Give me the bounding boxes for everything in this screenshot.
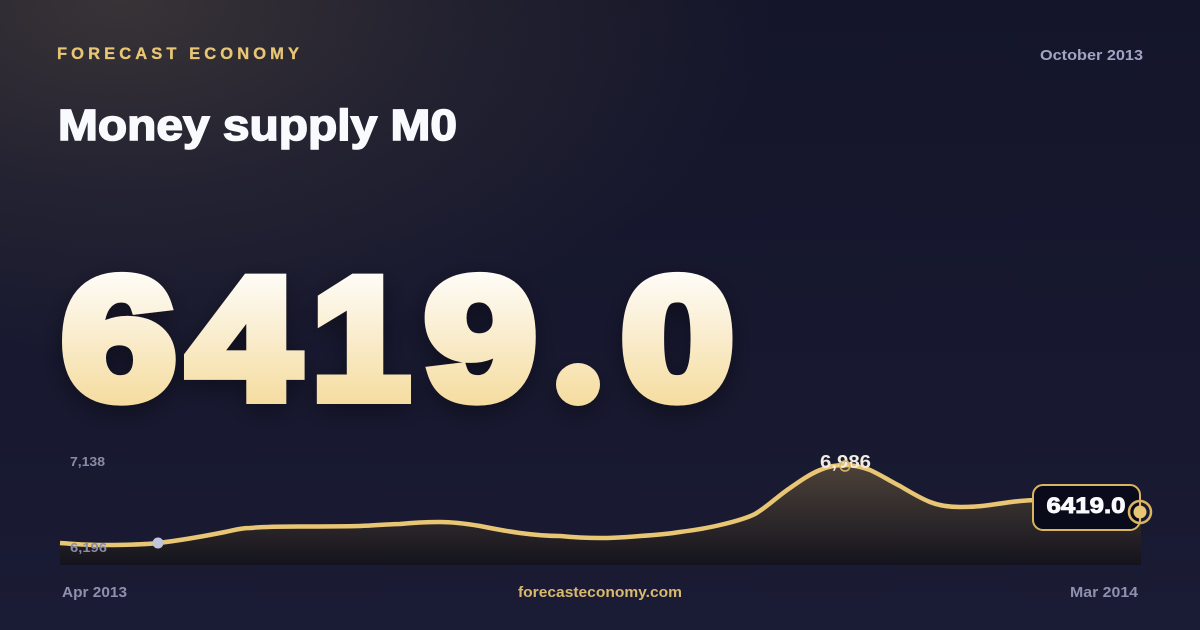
- big value: 0: [621, 242, 734, 435]
- peak marker: [840, 461, 850, 471]
- axis min label: 6,196: [70, 540, 107, 555]
- big value: .: [550, 243, 605, 435]
- title: Money supply M0: [58, 101, 457, 150]
- end date: Mar 2014: [1070, 584, 1139, 601]
- big value: 4: [188, 244, 299, 435]
- brand label: FORECAST ECONOMY: [57, 45, 299, 63]
- axis max label: 7,138: [70, 454, 105, 469]
- big value: 9: [425, 242, 536, 435]
- peak value label: 6,986: [820, 452, 871, 472]
- date: October 2013: [1040, 47, 1143, 64]
- chart: [60, 452, 1151, 565]
- latest value callout: 6419.0: [1046, 493, 1126, 518]
- big value: 1: [312, 243, 410, 435]
- website: forecasteconomy.com: [518, 584, 682, 601]
- big value: [62, 242, 734, 435]
- start date: Apr 2013: [62, 584, 127, 601]
- big value: 6: [62, 243, 176, 435]
- start point marker: [152, 538, 164, 548]
- chart line: [60, 465, 1040, 545]
- latest value callout: [1033, 485, 1140, 530]
- chart area: [60, 465, 1141, 565]
- latest point marker: [1129, 501, 1151, 523]
